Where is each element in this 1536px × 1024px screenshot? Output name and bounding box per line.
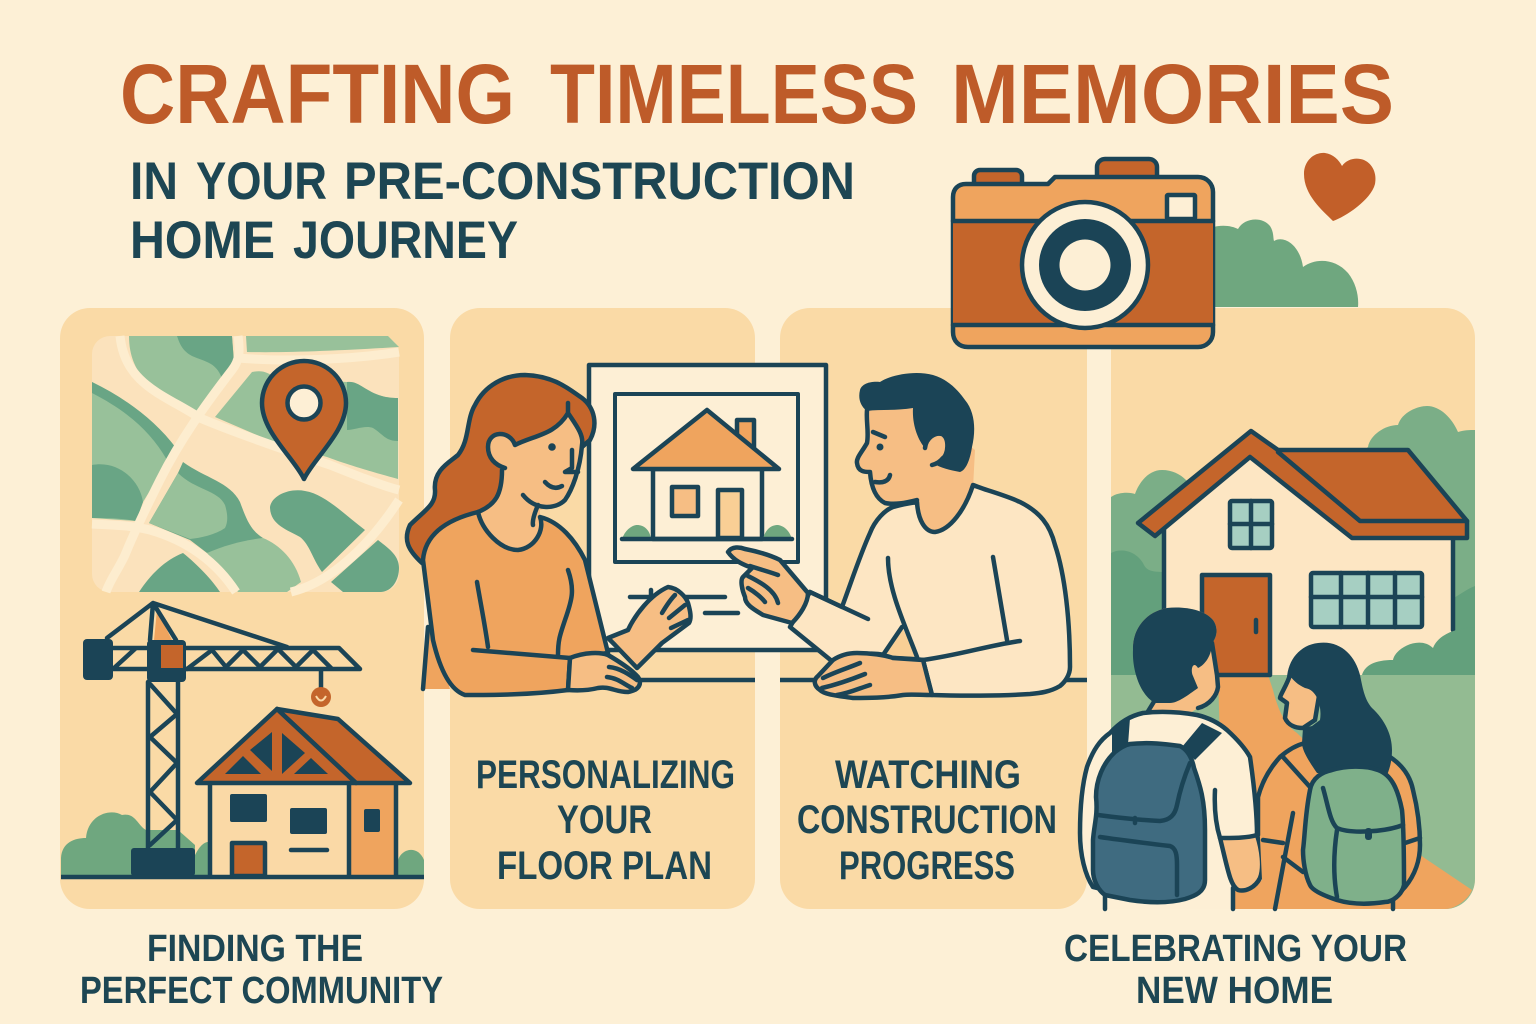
house	[1138, 431, 1475, 675]
label: celebrating your new home: CELEBRATING YOUR	[1064, 928, 1407, 970]
label: watching construction progress: WATCHING	[835, 753, 1021, 797]
panel: personalizing floor plan	[450, 308, 755, 909]
subtitle: HOME	[130, 211, 275, 270]
label: celebrating your new home	[1064, 928, 1407, 1012]
man	[728, 373, 1070, 698]
label: celebrating your new home: NEW HOME	[1136, 970, 1333, 1012]
label: finding the perfect community: PERFECT COMMUNITY	[80, 970, 443, 1012]
woman	[407, 375, 691, 695]
label: watching construction progress: PROGRESS	[839, 844, 1015, 888]
label: personalizing your floor plan: PERSONALIZING	[476, 753, 735, 797]
woman with backpack	[1258, 643, 1420, 909]
panel: finding the community	[60, 308, 424, 909]
floor plan board	[589, 365, 826, 650]
subtitle: IN	[130, 152, 178, 211]
panel: celebrating new home	[1111, 308, 1475, 909]
path	[1218, 675, 1472, 909]
map	[92, 336, 399, 592]
panel: watching construction	[780, 308, 1087, 909]
icon: bush behind camera	[1210, 220, 1358, 307]
illustration: woman and man reviewing a plan	[407, 365, 1087, 698]
icon: heart	[1304, 153, 1376, 221]
man with backpack	[1080, 608, 1262, 909]
label: watching construction progress	[797, 753, 1057, 888]
label: personalizing your floor plan	[476, 753, 735, 888]
icon: map pin	[262, 361, 346, 479]
label: personalizing your floor plan: YOUR	[557, 798, 652, 842]
icon: crane and house under construction	[61, 603, 424, 877]
background bushes	[1111, 406, 1475, 675]
title: CRAFTING	[120, 47, 515, 141]
subtitle	[130, 152, 855, 270]
label: finding the perfect community	[80, 928, 443, 1012]
subtitle: YOUR	[196, 152, 327, 211]
lawn	[1111, 675, 1475, 909]
title	[120, 47, 1394, 141]
subtitle: JOURNEY	[293, 211, 518, 270]
label: personalizing your floor plan: FLOOR PLAN	[497, 844, 712, 888]
title: MEMORIES	[951, 47, 1394, 141]
icon: camera	[953, 159, 1213, 347]
label: finding the perfect community: FINDING THE	[147, 928, 363, 970]
subtitle: PRE-CONSTRUCTION	[344, 152, 855, 211]
label: watching construction progress: CONSTRUCTION	[797, 798, 1057, 842]
table line	[640, 678, 1087, 682]
title: TIMELESS	[550, 47, 918, 141]
illustration: couple with backpacks	[1080, 608, 1420, 909]
